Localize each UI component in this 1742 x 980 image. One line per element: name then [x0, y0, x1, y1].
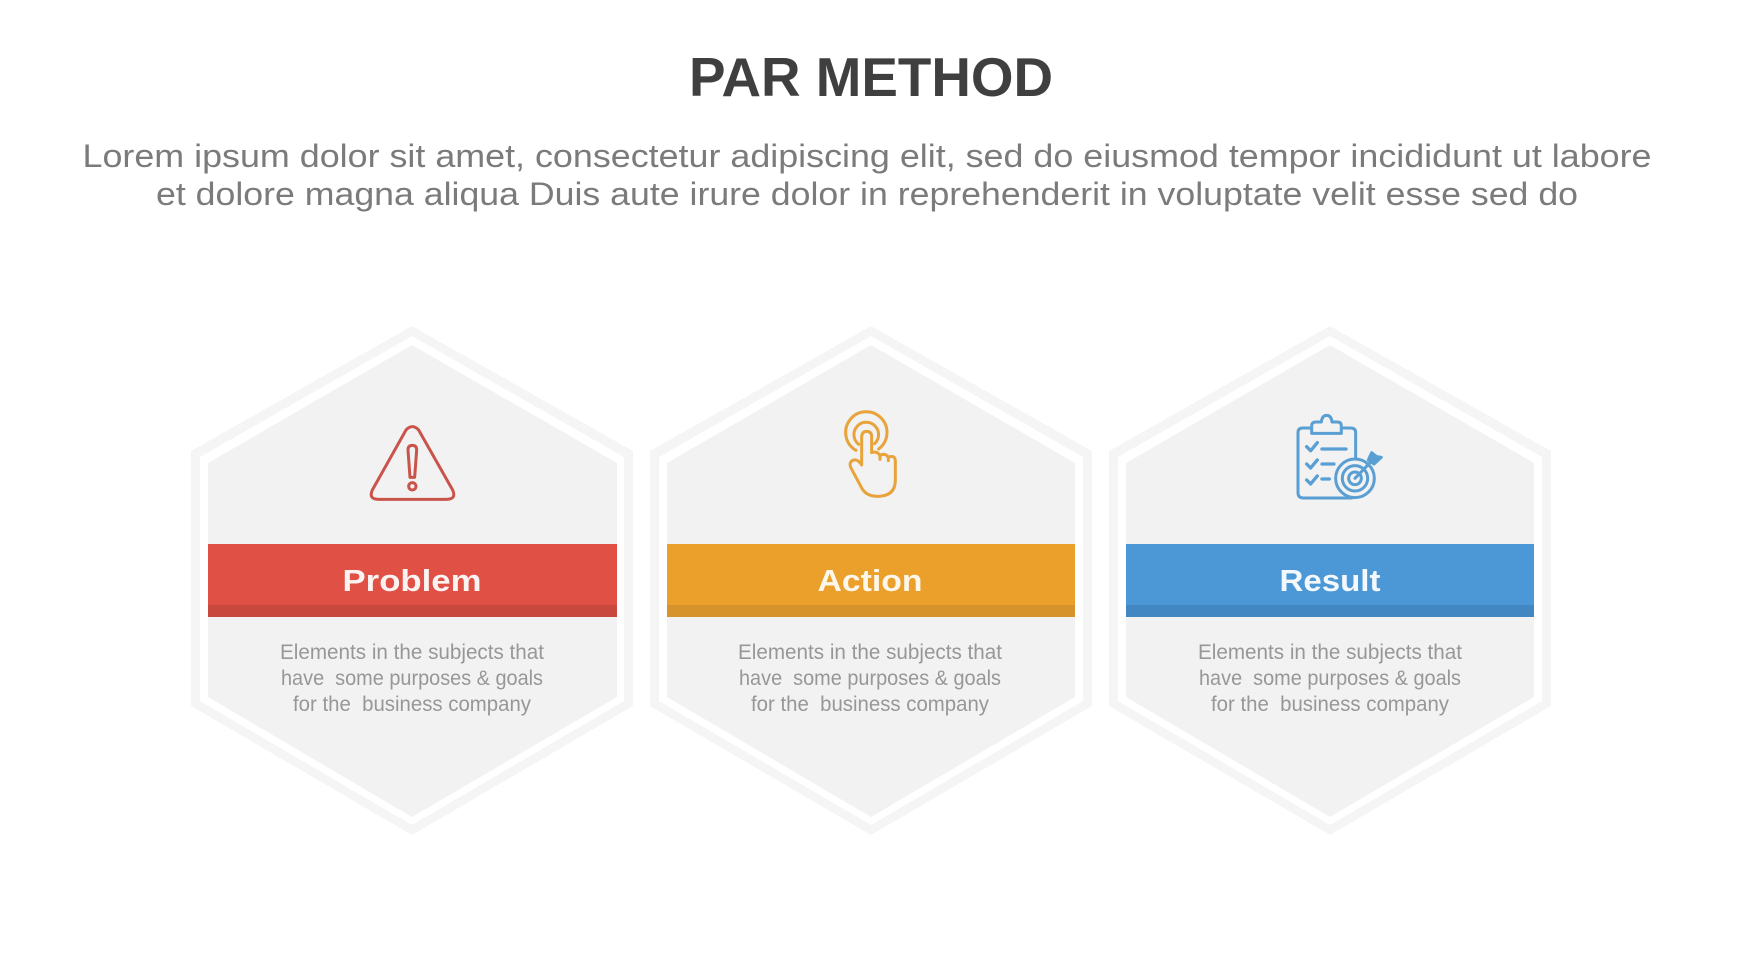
band: Problem: Problem — [342, 563, 482, 598]
description: action: Elements in the subjects that — [738, 641, 1002, 664]
hexagon ring: action — [650, 326, 1092, 835]
hexagon ring: problem — [191, 326, 633, 835]
description: problem: Elements in the subjects that — [280, 641, 544, 664]
description: action: for the business company — [751, 693, 989, 716]
hexagon body: action — [667, 345, 1075, 817]
description: action: have some purposes & goals — [739, 667, 1001, 690]
panel: action — [650, 326, 1092, 835]
subtitle text: Lorem ipsum dolor sit amet, consectetur adipiscing elit, sed do eiusmod tempor incididunt ut labore — [82, 138, 1652, 174]
description: result: for the business company — [1211, 693, 1449, 716]
description: problem: for the business company — [293, 693, 531, 716]
band: Result — [1126, 544, 1534, 617]
panel: result — [1109, 326, 1551, 835]
band: Problem — [208, 544, 617, 617]
icon: warning triangle — [371, 427, 454, 499]
band: Action — [667, 544, 1075, 617]
icon: clipboard checklist with target — [1298, 415, 1381, 498]
description: action — [738, 641, 1002, 716]
hexagon body: problem — [208, 345, 617, 817]
band: Action: Action — [818, 563, 922, 598]
subtitle text — [82, 138, 1652, 212]
subtitle text: et dolore magna aliqua Duis aute irure dolor in reprehenderit in voluptate velit esse sed do — [156, 176, 1578, 212]
panel: problem — [191, 326, 633, 835]
icon: pointing hand with target rings — [846, 412, 895, 496]
band: Result: Result — [1280, 563, 1380, 598]
hexagon ring: result — [1109, 326, 1551, 835]
description: result: Elements in the subjects that — [1198, 641, 1462, 664]
description: result: have some purposes & goals — [1199, 667, 1461, 690]
description: problem — [280, 641, 544, 716]
title: PAR METHOD — [689, 46, 1053, 108]
description: result — [1198, 641, 1462, 716]
hexagon body: result — [1126, 345, 1534, 817]
description: problem: have some purposes & goals — [281, 667, 543, 690]
